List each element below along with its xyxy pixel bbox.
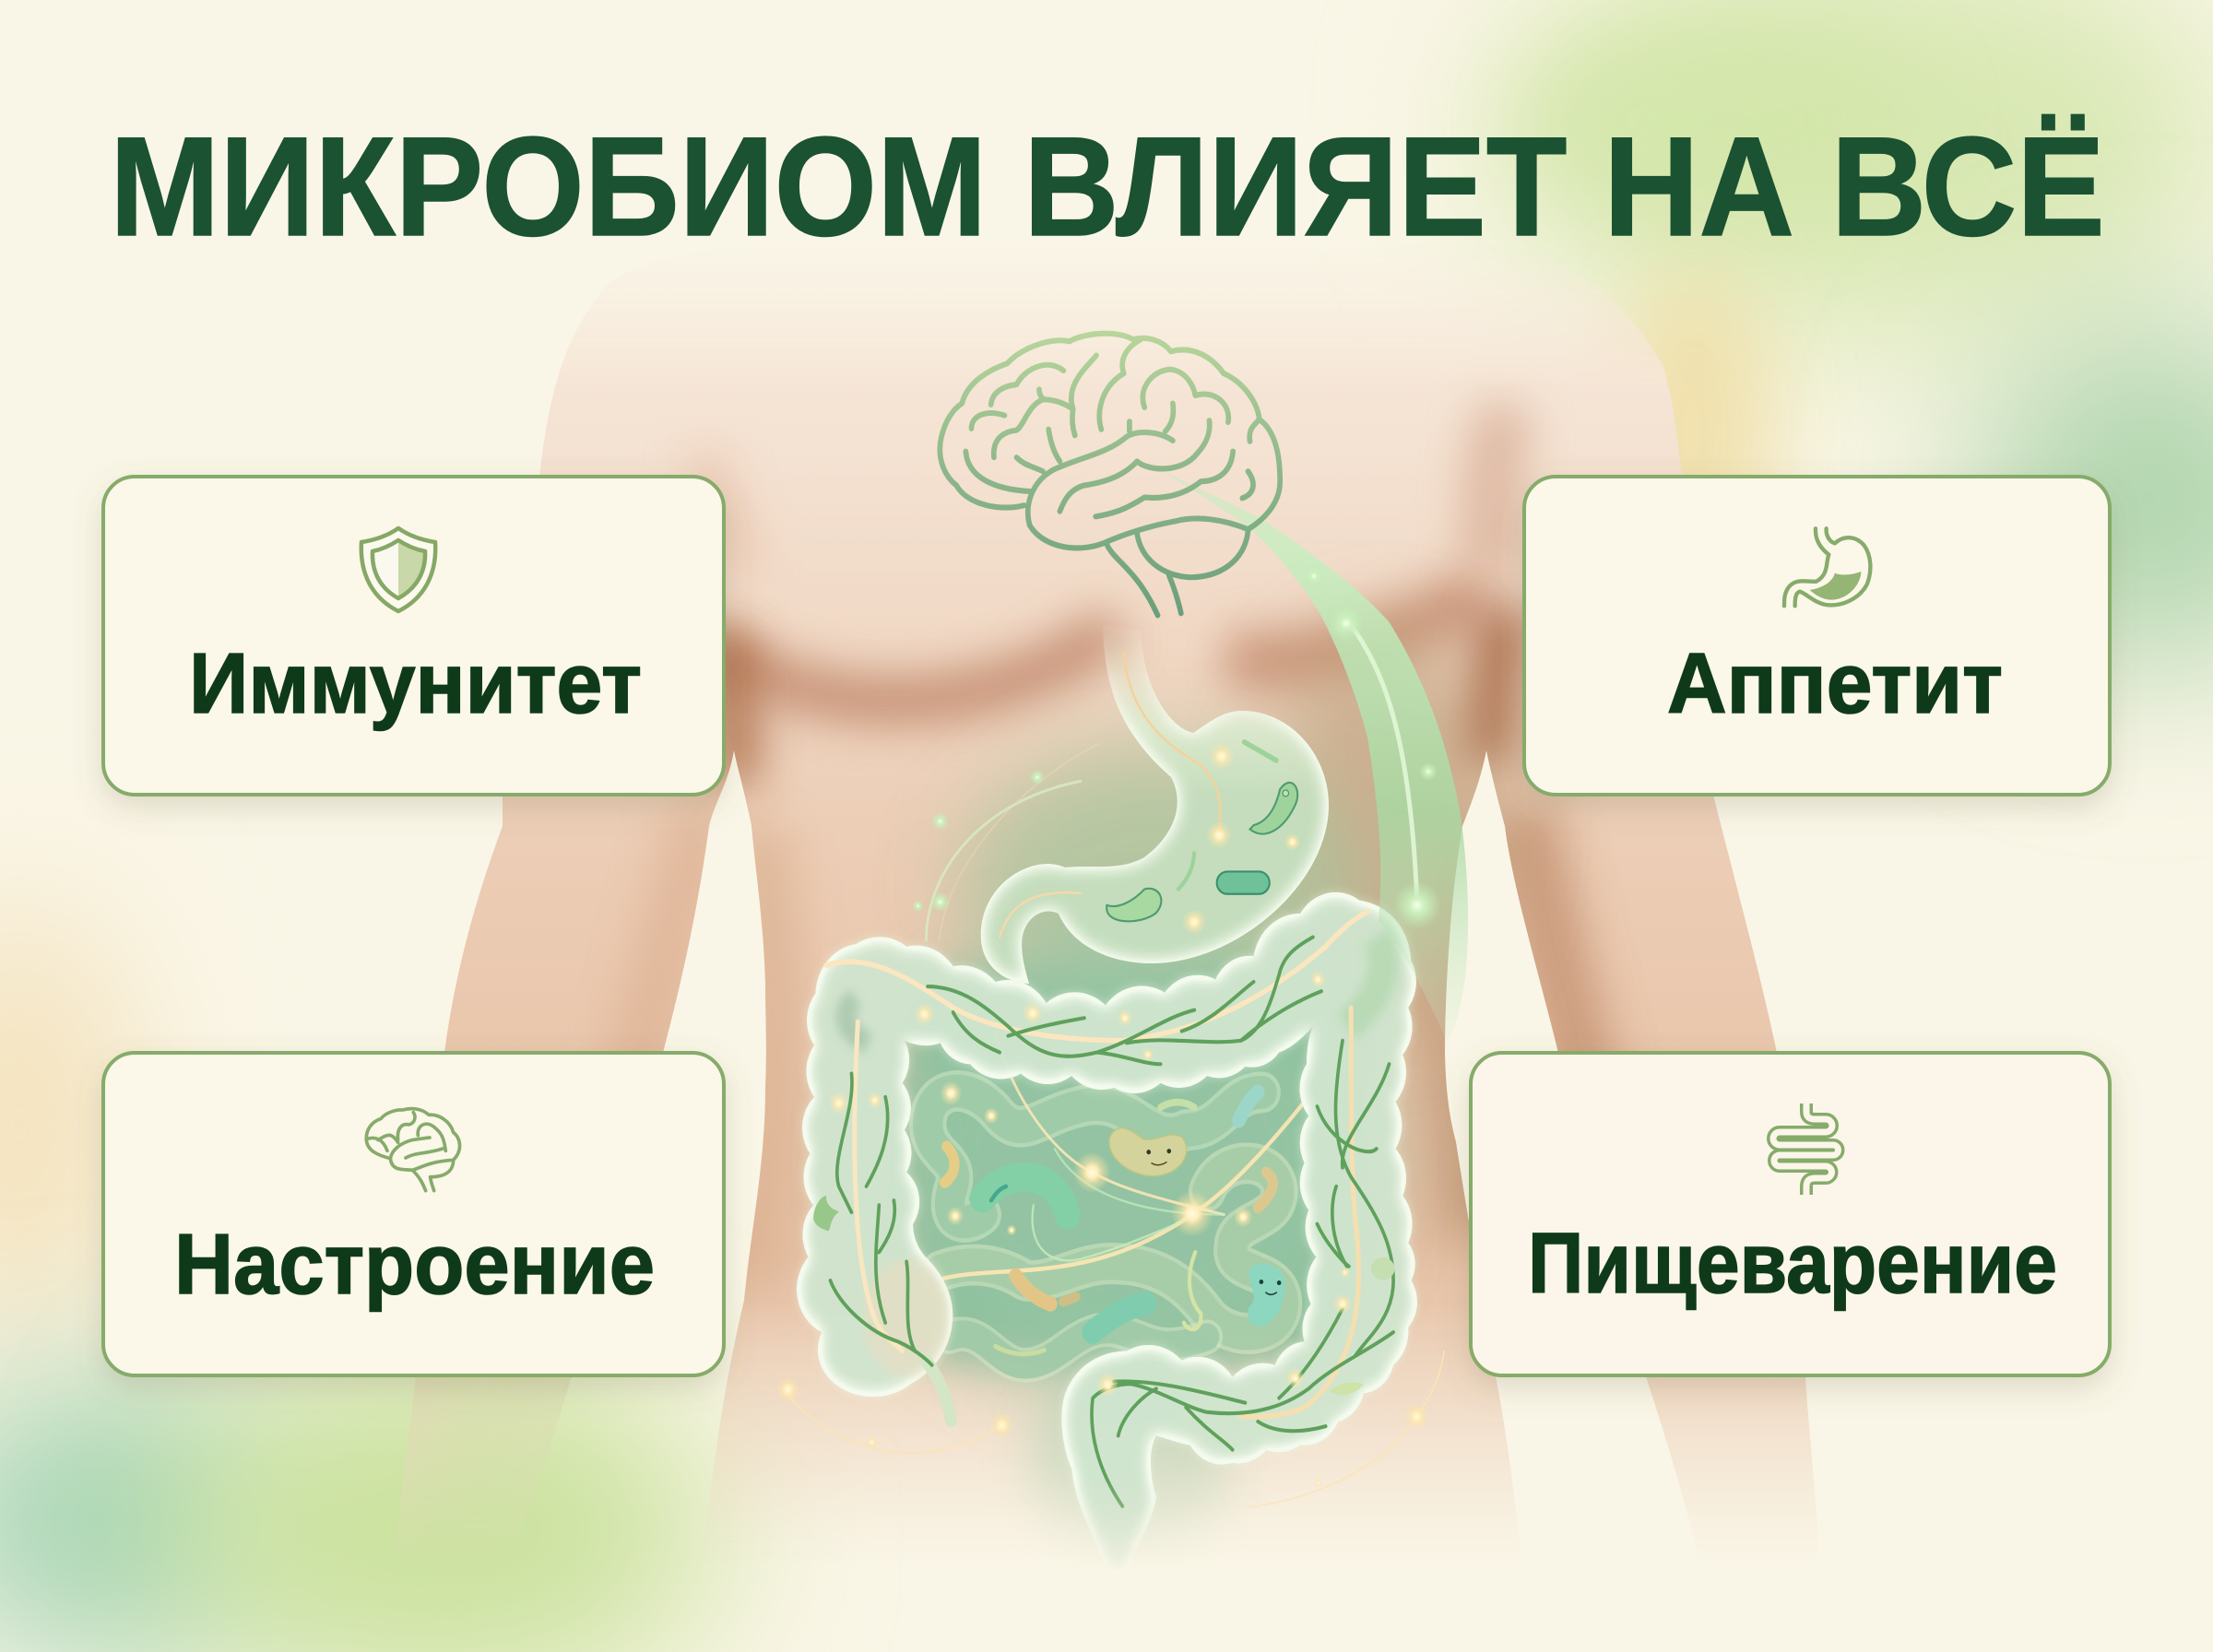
gut bacteria: [944, 1092, 1284, 1354]
intestines group: [776, 892, 1444, 1576]
human torso silhouette: [400, 299, 1817, 1513]
gut-brain axis band: [1157, 468, 1468, 1042]
green wisps beside stomach: [912, 743, 1099, 940]
appendix: [926, 1361, 951, 1421]
icon: shield: [361, 528, 435, 611]
abdomen green glow: [876, 747, 1374, 1558]
golden energy lines: [941, 1077, 1304, 1280]
glowing dots in intestines: [829, 971, 1352, 1398]
icon: intestine: [1773, 1103, 1839, 1195]
small intestine tubes: [928, 1091, 1284, 1365]
icon: stomach: [1784, 528, 1870, 606]
label: Настроение: [174, 1216, 655, 1312]
card: Аппетит: [1524, 477, 2110, 795]
icon: brain: [366, 1109, 460, 1191]
vines and gold threads: [813, 911, 1394, 1506]
card: Настроение: [103, 1053, 724, 1375]
belly glowing arcs: [776, 1351, 1444, 1507]
brain outline: [940, 334, 1280, 615]
label: Иммунитет: [189, 635, 642, 731]
stomach contents: [1000, 654, 1301, 938]
card: Пищеварение: [1471, 1053, 2110, 1375]
label: Аппетит: [1667, 635, 2003, 731]
large intestine colon: [797, 892, 1417, 1576]
label: Пищеварение: [1528, 1215, 2057, 1311]
card: Иммунитет: [103, 477, 724, 795]
stomach: [981, 625, 1329, 984]
title: МИКРОБИОМ ВЛИЯЕТ НА ВСЁ: [110, 108, 2105, 266]
